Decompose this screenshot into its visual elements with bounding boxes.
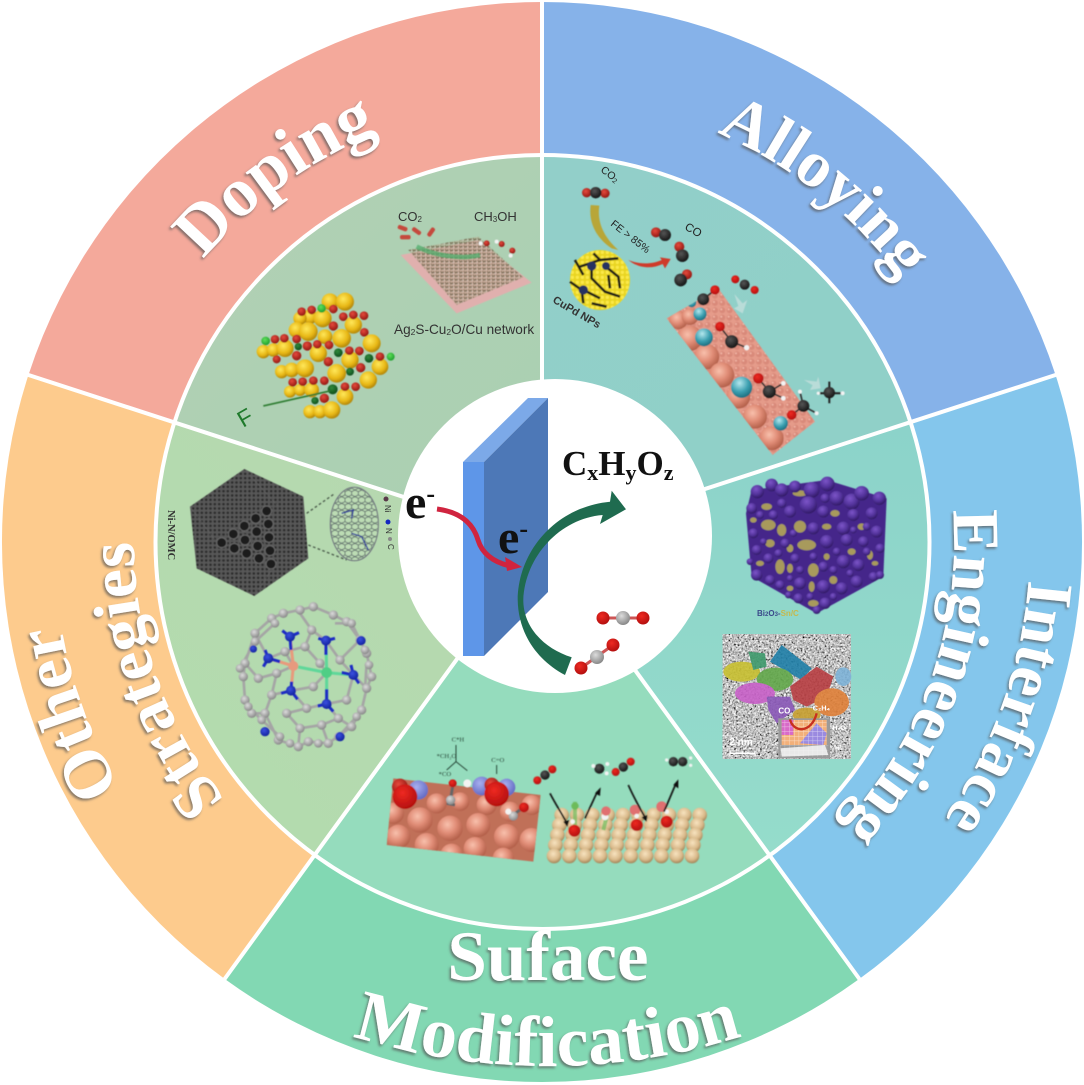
- label: CxHyOz product: x: [587, 460, 598, 485]
- panel: other strategies outer segment: [2, 375, 542, 979]
- label: Ag2S-Cu2O/Cu network: 2: [411, 327, 416, 337]
- illustration: copper surface with adsorbates: *CO: [439, 771, 451, 778]
- label: CH3OH: OH: [497, 209, 517, 224]
- label: Bi2O3 composite: Bi2O3-Sn/C: [757, 609, 799, 618]
- heading: Doping: Doping: [168, 100, 380, 261]
- illustration: TEM micrograph with coloured domains: H₂: [835, 745, 843, 752]
- arrow: electron flow: [437, 509, 522, 571]
- illustration: Ag2S-Cu2O network: [397, 224, 532, 313]
- label: CuPd NPs: CuPd NPs: [550, 294, 603, 331]
- arrow: CO2 conversion: [518, 491, 626, 675]
- panel: surface modification outer segment: [225, 542, 859, 1082]
- label: Ag2S-Cu2O/Cu network: 2: [446, 327, 451, 337]
- label: e- outside: e: [405, 476, 426, 529]
- illustration: copper surface with adsorbates: C*H: [452, 736, 464, 743]
- icon: CO2 molecule lower: [574, 638, 620, 674]
- label: Ni-N/OMC: Ni-N/OMC: [165, 510, 176, 560]
- heading: Modification: Modification: [351, 991, 742, 1070]
- illustration: TEM micrograph with coloured domains: C₂H₄: [813, 704, 830, 713]
- heading: Engineering: Engineering: [832, 510, 998, 850]
- illustration: Bi2O3 porous composite: [746, 477, 887, 614]
- label: CH3OH: 3: [493, 215, 498, 224]
- panel: doping inner segment: [174, 155, 542, 542]
- label: e- outside: -: [426, 479, 435, 508]
- heading: Interface: Interface: [944, 582, 1072, 834]
- legend: Ni, N, C atoms: [383, 496, 395, 550]
- panel: surface inner segment: [316, 542, 770, 929]
- legend: Ni, N, C atoms: C: [386, 544, 395, 550]
- illustration: copper surface with adsorbates: [383, 736, 707, 869]
- label: CO2: CO: [398, 209, 418, 224]
- panel: doping outer segment: [28, 2, 542, 542]
- label: e- in electrode: e: [498, 511, 519, 564]
- label: CxHyOz product: z: [664, 460, 674, 485]
- heading: Strategies: Strategies: [90, 544, 222, 822]
- illustration: copper surface with adsorbates: C=O: [491, 757, 505, 764]
- illustration: TEM micrograph with coloured domains: H₂O: [833, 725, 846, 732]
- illustration: dual-atom fullerene cage: [236, 602, 376, 751]
- label: CO2: 2: [418, 215, 422, 224]
- panel: alloying outer segment: [542, 2, 1056, 542]
- heading: Other: Other: [26, 630, 112, 802]
- label: e- in electrode: -: [519, 514, 528, 543]
- illustration: fluorine doped cluster: [257, 293, 395, 419]
- label: CO: CO: [682, 221, 703, 240]
- label: Ag2S-Cu2O/Cu network: S-Cu: [415, 322, 446, 337]
- label: F: F: [232, 403, 258, 432]
- illustration: TEM micrograph with coloured domains: 2 nm: [729, 737, 753, 748]
- legend: Ni, N, C atoms: Ni: [383, 505, 392, 513]
- label: Ag2S-Cu2O/Cu network: Ag: [394, 322, 411, 337]
- illustration: Ni-N/OMC porous polyhedron: [190, 469, 378, 596]
- illustration: copper surface with adsorbates: *CH₂O: [437, 753, 457, 760]
- heading: Suface: Suface: [447, 918, 649, 996]
- panel: interface engineering outer segment: [542, 375, 1082, 979]
- label: CH3OH: CH: [474, 209, 493, 224]
- label: CO2 product: CO: [598, 164, 618, 183]
- label: Ag2S-Cu2O/Cu network: O/Cu network: [451, 322, 534, 337]
- illustration: TEM micrograph with coloured domains: CO: [778, 706, 790, 715]
- illustration: TEM micrograph with coloured domains: [723, 634, 851, 759]
- panel: alloying inner segment: [542, 155, 910, 542]
- panel: interface inner segment: [542, 422, 929, 855]
- label: CO2 product: 2: [611, 178, 618, 186]
- legend: Ni, N, C atoms: N: [384, 528, 393, 534]
- label: FE > 85%: FE > 85%: [608, 218, 652, 256]
- central circle: [398, 379, 712, 693]
- icon: CO2 molecule upper: [596, 611, 650, 625]
- label: CxHyOz product: C: [562, 444, 587, 483]
- label: CxHyOz product: y: [626, 460, 637, 485]
- label: CxHyOz product: H: [598, 444, 626, 483]
- heading: Alloying: Alloying: [715, 102, 926, 287]
- illustration: CuPd nanoparticles: [570, 187, 845, 455]
- icon: electrode slab: [463, 398, 548, 656]
- panel: other strategies inner segment: [155, 422, 542, 855]
- label: CxHyOz product: O: [637, 444, 664, 483]
